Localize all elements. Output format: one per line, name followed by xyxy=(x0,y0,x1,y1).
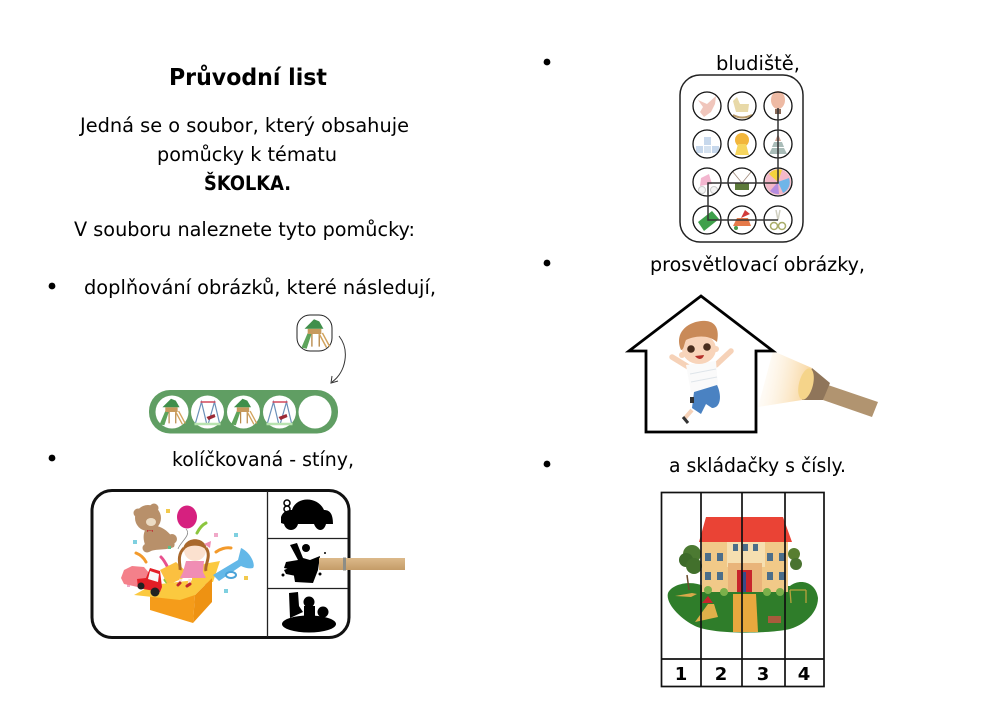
house outline xyxy=(629,296,773,432)
number puzzle xyxy=(661,492,824,686)
title: Průvodní list xyxy=(169,64,327,91)
arrow: card to empty slot xyxy=(331,336,345,383)
icon: tower card xyxy=(297,315,332,351)
puzzle numbers: 3 xyxy=(757,664,769,685)
intro text xyxy=(78,114,409,195)
silhouette: car xyxy=(281,500,333,530)
puzzle numbers: 4 xyxy=(798,664,810,685)
silhouette: toy group xyxy=(282,592,336,632)
sequence strip xyxy=(149,390,338,434)
balloon xyxy=(177,506,197,549)
bullet: maze xyxy=(544,52,800,75)
bullet: number puzzle: a skládačky s čísly. xyxy=(669,454,846,477)
house and flashlight illustration xyxy=(629,296,878,432)
flashlight xyxy=(795,367,878,417)
bullet: peg game xyxy=(49,448,354,471)
intro text: ŠKOLKA. xyxy=(204,171,291,195)
teddy bear xyxy=(134,504,177,552)
clothespin xyxy=(319,558,405,570)
intro text: pomůcky k tématu xyxy=(157,143,337,166)
silhouette: toy box xyxy=(282,543,326,583)
maze tile rings xyxy=(693,92,792,234)
bullet: sequence completion: doplňování obrázků, které následují, xyxy=(84,276,436,299)
toy car xyxy=(121,566,162,596)
maze tile pictures xyxy=(696,91,791,231)
cardboard box xyxy=(134,561,220,623)
toy box illustration xyxy=(121,504,254,623)
puzzle numbers xyxy=(675,664,810,685)
puzzle numbers: 2 xyxy=(715,664,727,685)
maze path xyxy=(708,108,778,220)
trumpet xyxy=(213,548,254,581)
bullet: see-through pictures xyxy=(544,253,865,276)
puzzle numbers: 1 xyxy=(675,664,687,685)
puzzle grid xyxy=(661,492,824,686)
maze card xyxy=(680,75,803,242)
sequence activity illustration xyxy=(149,315,345,434)
doll xyxy=(178,539,211,586)
confetti xyxy=(136,523,231,589)
bullet: number puzzle xyxy=(544,454,846,477)
lead-in sentence: V souboru naleznete tyto pomůcky: xyxy=(74,218,415,241)
kindergarten building picture xyxy=(668,517,818,633)
bullet: see-through pictures: prosvětlovací obrázky, xyxy=(650,253,865,276)
bullet: peg game: kolíčkovaná - stíny, xyxy=(172,448,354,471)
bullet: maze: bludiště, xyxy=(716,52,800,75)
light beam xyxy=(758,351,812,407)
boy xyxy=(672,321,731,423)
peg card xyxy=(92,490,405,638)
intro text: Jedná se o soubor, který obsahuje xyxy=(78,114,409,137)
